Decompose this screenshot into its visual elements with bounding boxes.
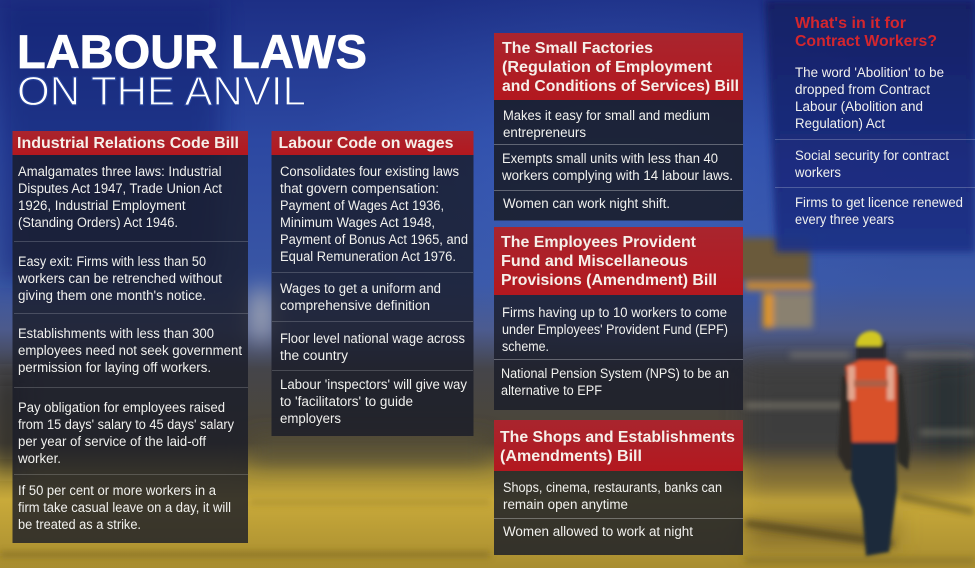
- heading: labour code on wages: Labour Code on wages: [278, 135, 454, 152]
- text: body points: Equal Remuneration Act 1976.: [280, 249, 456, 264]
- title: [17, 25, 367, 114]
- text: body points: Exempts small units with less than 40: [502, 151, 718, 166]
- text: body points: Shops, cinema, restaurants, banks can: [503, 480, 722, 495]
- heading: what's in it for contract workers: [795, 15, 937, 50]
- text: body points: Firms to get licence renewed: [795, 195, 963, 210]
- text: body points: remain open anytime: [503, 497, 628, 512]
- text: body points: from 15 days' salary to 45 days' salary: [18, 417, 234, 432]
- text: body points: Amalgamates three laws: Industrial: [18, 164, 222, 179]
- text: body points: Establishments with less than 300: [18, 326, 214, 341]
- text: body points: If 50 per cent or more workers in a: [18, 483, 217, 498]
- heading: industrial relations code bill: Industrial Relations Code Bill: [17, 135, 239, 152]
- text: body points: Social security for contract: [795, 148, 949, 163]
- heading: small factories bill: (Regulation of Employment: [502, 59, 712, 76]
- text: body points: Labour 'inspectors' will give way: [280, 377, 467, 392]
- text: body points: employers: [280, 411, 341, 426]
- text: body points: Disputes Act 1947, Trade Union Act: [18, 181, 222, 196]
- heading: what's in it for contract workers: What's in it for: [795, 15, 906, 32]
- text: body points: Wages to get a uniform and: [280, 281, 441, 296]
- text: body points: National Pension System (NPS) to be an: [501, 366, 729, 381]
- text: body points: under Employees' Provident Fund (EPF): [502, 322, 728, 337]
- text: body points: that govern compensation:: [280, 181, 439, 196]
- text: body points: the country: [280, 348, 348, 363]
- panel: shops and establishments bill: [494, 420, 743, 555]
- text: body points: The word 'Abolition' to be: [795, 65, 944, 80]
- text: body points: Minimum Wages Act 1948,: [280, 215, 435, 230]
- text: body points: Women can work night shift.: [503, 196, 670, 211]
- text: body points: Women allowed to work at night: [503, 524, 693, 539]
- text: body points: [494, 480, 743, 539]
- text: body points: every three years: [795, 212, 894, 227]
- heading: what's in it for contract workers: Contract Workers?: [795, 33, 937, 50]
- text: body points: Firms having up to 10 workers to come: [502, 305, 727, 320]
- panel: industrial relations code bill: [12, 131, 248, 543]
- title: ON THE ANVIL: [17, 68, 306, 114]
- text: body points: Floor level national wage across: [280, 331, 465, 346]
- text: body points: giving them one month's notice.: [18, 288, 206, 303]
- text: body points: [494, 108, 743, 211]
- text: body points: [775, 65, 975, 227]
- text: body points: comprehensive definition: [280, 298, 430, 313]
- text: body points: permission for laying off workers.: [18, 360, 211, 375]
- heading: shops and establishments bill: (Amendments) Bill: [500, 448, 642, 465]
- text: body points: Makes it easy for small and medium: [503, 108, 710, 123]
- panel: labour code on wages: [272, 131, 474, 436]
- panel: employees provident fund bill: [494, 227, 743, 410]
- text: body points: Regulation) Act: [795, 116, 885, 131]
- icon: worker in orange vest and yellow helmet: [838, 331, 910, 556]
- panel: small factories bill: [494, 33, 743, 220]
- heading: shops and establishments bill: The Shops and Establishments: [500, 429, 735, 446]
- text: body points: [272, 164, 473, 426]
- heading: small factories bill: [494, 33, 743, 100]
- text: body points: firm take casual leave on a day, it will: [18, 500, 231, 515]
- heading: small factories bill: and Conditions of Services) Bill: [502, 78, 739, 95]
- text: body points: be treated as a strike.: [18, 517, 141, 532]
- text: body points: dropped from Contract: [795, 82, 930, 97]
- text: body points: alternative to EPF: [501, 383, 602, 398]
- text: body points: worker.: [17, 451, 61, 466]
- text: body points: Payment of Bonus Act 1965, and: [280, 232, 468, 247]
- text: body points: scheme.: [502, 339, 549, 354]
- title: LABOUR LAWS: [17, 25, 367, 78]
- heading: labour code on wages: [272, 131, 474, 155]
- heading: industrial relations code bill: [12, 131, 248, 155]
- text: body points: [494, 305, 743, 398]
- text: body points: Labour (Abolition and: [795, 99, 923, 114]
- panel: what's in it for contract workers: [765, 0, 975, 252]
- text: body points: workers: [794, 165, 841, 180]
- text: body points: (Standing Orders) Act 1946.: [18, 215, 178, 230]
- text: body points: employees need not seek government: [18, 343, 242, 358]
- text: body points: workers complying with 14 labour laws.: [501, 168, 733, 183]
- heading: employees provident fund bill: Fund and Miscellaneous: [501, 253, 688, 270]
- text: body points: Easy exit: Firms with less than 50: [18, 254, 206, 269]
- heading: shops and establishments bill: [494, 420, 743, 471]
- heading: employees provident fund bill: The Employees Provident: [501, 234, 696, 251]
- heading: employees provident fund bill: Provisions (Amendment) Bill: [501, 272, 717, 289]
- text: body points: to 'facilitators' to guide: [280, 394, 413, 409]
- heading: small factories bill: The Small Factories: [502, 40, 653, 57]
- text: body points: Consolidates four existing laws: [280, 164, 459, 179]
- text: body points: [14, 164, 248, 532]
- text: body points: Payment of Wages Act 1936,: [280, 198, 444, 213]
- text: body points: entrepreneurs: [503, 125, 586, 140]
- text: body points: 1926, Industrial Employment: [18, 198, 186, 213]
- text: body points: workers can be retrenched without: [17, 271, 222, 286]
- text: body points: per year of service of the laid-off: [18, 434, 206, 449]
- text: body points: Pay obligation for employees raised: [18, 400, 225, 415]
- heading: employees provident fund bill: [494, 227, 743, 295]
